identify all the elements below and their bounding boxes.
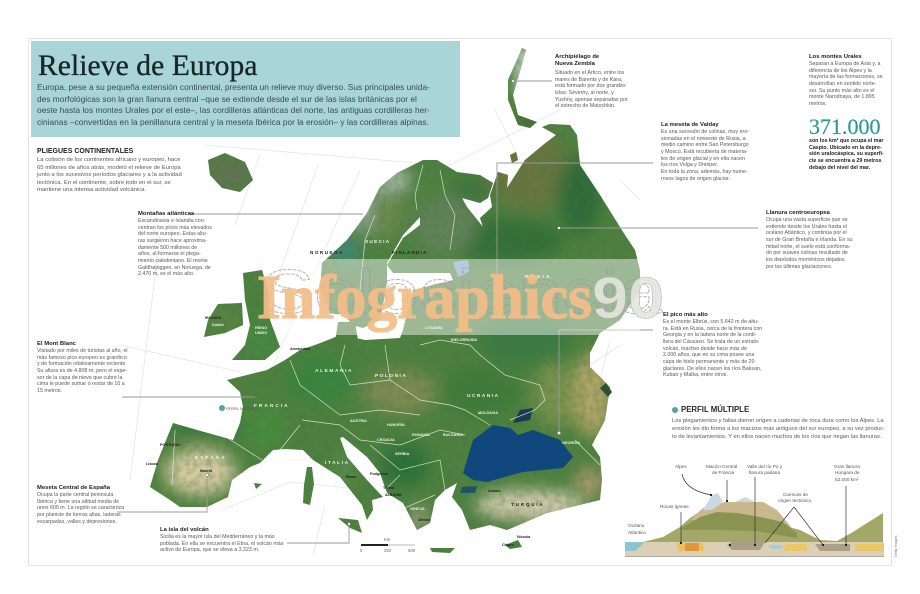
map of Europe: Tirana (383, 486, 395, 490)
text: montes Urales (809, 54, 883, 107)
text: meseta de Valday: medio camino entre San Petersburgo (661, 142, 749, 148)
text: archipiélago: está formado por dos grandes (555, 83, 626, 89)
map of Europe: Podgorica (370, 472, 389, 476)
text: meseta de Valday: rosos lagos de origen glaciar. (661, 176, 730, 182)
text: montes Urales: monte Narodnaya, de 1.895 (809, 94, 875, 100)
text: llanura centroeuropea (766, 210, 853, 270)
text: meseta de Valday: Es una sucesión de colinas, muy ero- (661, 129, 749, 135)
text: montañas atlánticas: centran los picos más elevados (138, 225, 212, 231)
caspian note: son los km² que ocupa el mar (809, 138, 883, 144)
text: la isla del volcán: Sicilia es la mayor isla del Mediterráneo y la más (160, 534, 275, 540)
text: el Mont Blanc (37, 341, 128, 394)
watermark: Solociencia (262, 258, 663, 327)
map of Europe (117, 48, 758, 555)
map labels: BULGARIA (443, 433, 463, 437)
text: montes Urales: sur. Su punto más alto es el (809, 88, 874, 94)
text: archipiélago: el estrecho de Matochkin. (555, 103, 615, 109)
text: montañas atlánticas: ras surgieron hace aproxima- (138, 238, 207, 244)
scale bar: 250 (384, 548, 392, 553)
map labels: HUNGRÍA (387, 422, 405, 427)
map of Europe: Madrid (200, 469, 213, 473)
credit: Getty Images (894, 536, 898, 557)
text: pico más alto: Es el monte Elbrús, con 5.642 m de altu- (663, 319, 759, 325)
map labels: Dublín (212, 323, 224, 327)
text: llanura centroeuropea: Ocupa una vasta superficie que se (766, 217, 848, 223)
heading: perfil múltiple: PERFIL MÚLTIPLE (681, 405, 749, 414)
text: pliegues continentales: La colisión de los continentes africano y europeo, hace (37, 157, 180, 163)
cross-section chart: 52.000 km² (835, 477, 859, 482)
map of Europe: Amsterdam (290, 347, 311, 351)
text: pico más alto: El pico más alto (663, 312, 708, 318)
map of Europe: TURQUÍA (511, 500, 545, 507)
text: perfil (672, 418, 885, 440)
map labels: CROACIA (377, 438, 395, 442)
text: meseta de Valday: les de origen glacial y en ella nacen (661, 156, 745, 162)
text: la isla del volcán: poblada. En ella se encuentra el Etna, el volcán más (160, 541, 283, 547)
text: montañas atlánticas: Escandinavia e Islandia con- (138, 218, 205, 224)
text: pico más alto: ra. Está en Rusia, cerca de la frontera con (663, 326, 762, 332)
text: el Mont Blanc: más famoso pico europeo es granítico (37, 355, 127, 361)
text: la isla del volcán (160, 527, 284, 553)
watermark: Infographics (257, 264, 592, 332)
map of Europe: Roma (346, 475, 357, 479)
caspian note: sión uralocáspica, su superfi- (809, 151, 884, 157)
cross-section chart: Valle del río Po y (747, 464, 783, 469)
map of Europe: PORTUGAL (160, 443, 181, 447)
text: montañas atlánticas (138, 211, 212, 277)
text: el Mont Blanc: El Mont Blanc (37, 341, 76, 347)
map borders (172, 165, 600, 510)
map of Europe: ALBANIA (385, 493, 402, 497)
text: meseta central (37, 485, 124, 525)
title: Relieve de Europa (38, 50, 258, 82)
text: meseta de Valday: los ríos Volga y Dniéper. (661, 162, 718, 168)
cross-section chart: llanura padana (749, 470, 780, 475)
map of Europe: Lisboa (146, 462, 159, 466)
map labels: SUECIA (365, 239, 390, 245)
text: montañas atlánticas: Galdhøpiggen, en Noruega, de (138, 265, 211, 271)
text: pico más alto (663, 312, 762, 378)
text: pliegues continentales: tectónica. En el continente, sobre todo en el sur, se (37, 180, 171, 186)
scale bar: 0 (360, 548, 363, 553)
cross-section chart: Cuencas de (783, 492, 808, 497)
text: perfil: to de levantamientos. Y en ellos nacen muchos de los ríos que riegan las llanuras. (672, 434, 881, 440)
Perfil section marker (219, 405, 259, 411)
text: llanura centroeuropea: los depósitos morrénicos dejados (766, 257, 845, 263)
text: meseta de Valday: La meseta de Valday (661, 122, 719, 128)
text: pliegues continentales: 65 millones de años atrás, modeló el relieve de Europa (37, 164, 181, 170)
text: archipiélago (555, 54, 628, 109)
cross-section chart: Alpes (675, 464, 687, 469)
map labels: GRECIA (410, 507, 425, 511)
big number: 371.000 (809, 114, 880, 139)
map of Europe: IRLANDA (205, 316, 222, 320)
text: montes Urales: Separan a Europa de Asia y, a (809, 61, 880, 67)
scale bar: 500 (408, 548, 416, 553)
text: montes Urales: Los montes Urales (809, 54, 862, 60)
text: archipiélago: Archipiélago de (555, 54, 599, 60)
watermark: 90 (592, 266, 664, 331)
text: montañas atlánticas: Montañas atlánticas (138, 211, 194, 217)
text: archipiélago: islas: Séverny, al norte, y (555, 90, 614, 96)
text: pico más alto: 2.000 años, que en su cima posee una (663, 352, 754, 358)
text: montañas atlánticas: 2.470 m, es el más alto. (138, 271, 194, 277)
cross-section chart: Gran llanura (834, 464, 860, 469)
map labels: ESPAÑA (195, 454, 227, 461)
text: llanura centroeuropea: Llanura centroeuropea (766, 210, 830, 216)
text: llanura centroeuropea: do por suaves colinas resultado de (766, 250, 848, 256)
text: la isla del volcán: activo de Europa, que se eleva a 3.323 m. (160, 547, 259, 553)
text: la isla del volcán: La isla del volcán (160, 527, 209, 533)
map of Europe: Ankara (488, 489, 501, 493)
caspian note (809, 138, 884, 171)
text: montes Urales: mayoría de las formaciones, se (809, 74, 883, 80)
text: llanura centroeuropea: extiende desde los Urales hasta el (766, 224, 847, 230)
cross-section chart: de Francia (712, 470, 735, 475)
text: pliegues continentales: mantiene una intensa actividad volcánica. (37, 187, 146, 193)
text: llanura centroeuropea: océano Atlántico, y continúa por el (766, 230, 847, 236)
text: llanura centroeuropea: por las últimas glaciaciones. (766, 264, 832, 270)
caspian note: debajo del nivel del mar. (809, 165, 870, 171)
graticule lines (120, 110, 640, 555)
text: meseta central: por planicie de tierras altas, laderas (37, 512, 121, 518)
Black Sea (463, 408, 573, 482)
text: llanura centroeuropea: sur de Gran Bretaña e Irlanda. En su (766, 237, 853, 243)
text: pico más alto: volcán, inactivo desde hace más de (663, 346, 747, 352)
map of Europe: Chipre (502, 543, 514, 547)
text: archipiélago: mares de Barents y de Kara, (555, 77, 622, 83)
text: montañas atlánticas: miento caledoniano. El monte (138, 258, 208, 264)
title panel (31, 41, 460, 137)
text: montañas atlánticas: años, al formarse el plega- (138, 251, 201, 257)
text: archipiélago: Yushny, apenas separadas por (555, 97, 628, 103)
text: el Mont Blanc: y de formación relativamente reciente. (37, 361, 127, 367)
text: meseta de Valday (661, 122, 749, 182)
map labels: SERBIA (395, 452, 410, 456)
cross-section chart: Macizo Central (706, 464, 737, 469)
map labels: BIELORRUSIA (451, 338, 477, 342)
map of Europe: NORUEGA (310, 250, 344, 255)
text: pico más alto: Kuban y Malka, entre otros. (663, 372, 728, 378)
lakes and inland water (453, 260, 612, 493)
text: perfil: erosión les dio forma a los macizos más antiguos del sur europeo, a su vez produc- (672, 426, 885, 432)
text: pico más alto: capa de hielo permanente y más de 20 (663, 359, 755, 365)
scale bar (360, 537, 416, 553)
leader lines (117, 81, 758, 543)
map labels: RUSIA (525, 274, 552, 280)
cross-section chart: Rocas ígneas (660, 504, 689, 509)
text: el Mont Blanc: Su altura es de 4.808 m, pero el espe- (37, 368, 127, 374)
map labels: UCRANIA (467, 393, 500, 399)
text: meseta de Valday: En toda la zona, además, hay nume- (661, 169, 748, 175)
text: el Mont Blanc: sor de la capa de nieve que cubre la (37, 375, 122, 381)
cross-section chart: Húngara de (835, 470, 860, 475)
map labels: GEORGIA (562, 441, 580, 445)
map labels: LITUANIA (425, 326, 443, 330)
map labels: POLONIA (375, 373, 407, 379)
cross-section chart: Océano (628, 523, 645, 528)
text: pliegues continentales: PLIEGUES CONTINENTALES (37, 148, 133, 155)
text: archipiélago: Situado en el Ártico, entre los (555, 70, 624, 76)
map labels: ALEMANIA (315, 368, 353, 374)
map labels: REINO (255, 326, 267, 330)
intro text: Europa, pese a su pequeña extensión continental, presenta un relieve muy diverso. Sus principales unida- (37, 82, 430, 92)
text: montes Urales: diferencia de los Alpes y la (809, 68, 872, 74)
intro text: des morfológicas son la gran llanura central –que se extiende desde el sur de las islas británicas por el (37, 94, 417, 104)
text: pico más alto: llera del Cáucaso. Se trata de un estrato- (663, 339, 760, 345)
text: meseta central: Meseta Central de España (37, 485, 110, 491)
text: archipiélago: Nueva Zembla (555, 61, 595, 67)
text: el Mont Blanc: cima le puede sumar o restar de 10 a (37, 381, 125, 387)
map labels: UNIDO (255, 331, 267, 335)
map of Europe: Atenas (418, 518, 430, 522)
Perfil section marker: PERFIL MÚLTIPLE (226, 406, 259, 411)
map labels: FRANCIA (254, 403, 290, 409)
text: pliegues continentales: junto a los sucesivos períodos glaciares y a la actividad (37, 172, 182, 178)
text: montes Urales: metros. (809, 101, 827, 107)
intro text (37, 82, 430, 126)
map labels: AUSTRIA (350, 419, 367, 423)
watermark band (285, 259, 640, 335)
map labels: ITALIA (325, 460, 350, 466)
text: meseta central: Ocupa la parte central peninsula (37, 492, 113, 498)
map labels (195, 239, 580, 511)
text: montañas atlánticas: del norte europeo. Estas altu- (138, 231, 208, 237)
text: montañas atlánticas: damente 500 millones de (138, 245, 197, 251)
text: pico más alto: glaciares. De ellos nacen los ríos Baksan, (663, 366, 761, 372)
text: pliegues continentales (36, 148, 182, 193)
scale bar: Km (384, 537, 391, 542)
text: meseta central: unos 600 m. La región se caracteriza (37, 505, 124, 511)
caspian note: Caspio. Ubicado en la depre- (809, 145, 882, 151)
caspian note: cie se encuentra a 29 metros (809, 158, 881, 164)
intro text: cinianas –convertidas en la penillanura central y la meseta Ibérica por la erosión– y las cordilleras alpinas. (37, 116, 429, 126)
map labels: MOLDAVIA (478, 411, 498, 415)
text: el Mont Blanc: 15 metros. (37, 388, 62, 394)
text: perfil: Los plegamientos y fallas dieron origen a cadenas de roca dura como los Alpes. La (672, 418, 884, 424)
text: llanura centroeuropea: mitad norte, el suelo está conforma- (766, 244, 850, 250)
map labels: RUMANÍA (412, 432, 430, 437)
map of Europe: FINLANDIA (392, 250, 428, 255)
text: el Mont Blanc: Visitado por miles de turistas al año, el (37, 348, 128, 354)
text: meseta de Valday: y Moscú. Está recubierta de materia- (661, 149, 748, 155)
text: meseta central: Ibérica y tiene una altitud media de (37, 499, 119, 505)
text: pico más alto: Georgia y en la ladera norte de la cordi- (663, 332, 756, 338)
map of Europe: Nicosia (517, 535, 531, 539)
text: meseta de Valday: sionadas en el noroeste de Rusia, a (661, 136, 746, 142)
cross-section chart: origen tectónico (778, 498, 811, 503)
text: meseta central: escarpadas, valles y depresiones. (37, 519, 117, 525)
intro text: oeste hasta los montes Urales por el este–, las cordilleras atlánticas del norte, las antiguas cordilleras her- (37, 105, 430, 115)
text: montes Urales: desarrollan en sentido norte- (809, 81, 876, 87)
cross-section chart: Atlántico (628, 530, 646, 535)
